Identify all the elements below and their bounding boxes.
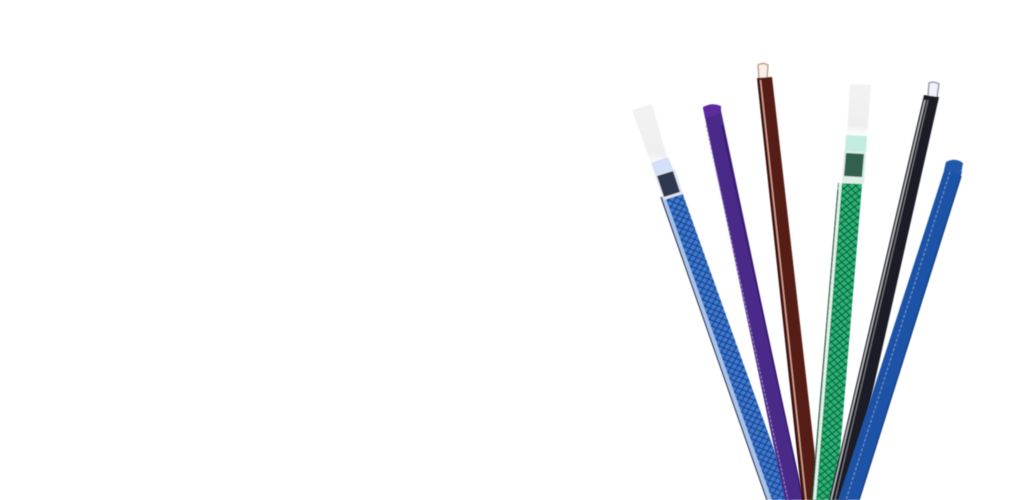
catheter: dark red-brown shaft with metal tip <box>757 64 820 500</box>
catheter: cobalt blue shaft <box>838 160 963 500</box>
catheter: purple shaft <box>703 104 803 500</box>
catheter: blue braided shaft with white tip <box>632 104 792 500</box>
catheter: black shaft with metal tip <box>829 82 939 500</box>
catheter: green braided shaft with white tip <box>812 84 871 500</box>
